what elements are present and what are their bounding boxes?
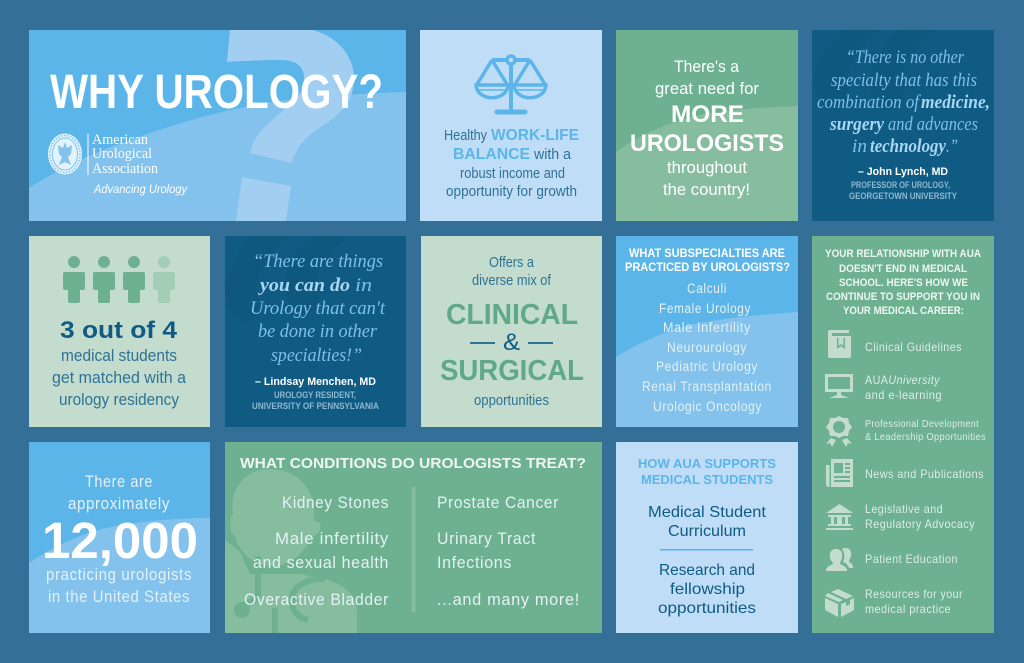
wave overlay [616,312,798,427]
divider [660,549,753,550]
quote emphasis surgery: surgery [829,114,885,135]
text: opportunities [474,393,549,409]
attribution university: GEORGETOWN UNIVERSITY [849,191,957,201]
item: resources: Resources for your [865,587,963,601]
icon: book [828,330,851,358]
panel background [225,442,602,633]
wave overlay [616,106,798,221]
icon: box [825,589,854,617]
icon: newspaper [826,459,853,487]
condition: Infections [437,553,512,572]
text: practicing urologists [46,565,192,584]
decorative quote marks [225,232,352,322]
panel background [616,236,798,427]
emphasis: clinical: CLINICAL [446,299,578,331]
item: news: News and Publications [865,467,984,481]
item: patient education: Patient Education [865,552,958,566]
stat: 3 out of 4 [60,317,178,344]
heading: WHY UROLOGY? [50,66,383,119]
panel background [812,236,994,633]
text: balance: BALANCE [453,146,530,163]
heading line 5: YOUR MEDICAL CAREER: [843,305,964,317]
text: healthy: Healthy [444,128,488,144]
title panel background [29,30,406,221]
panel: relationship with AUA [812,236,994,633]
quote emphasis medicine: medicine, [921,92,990,113]
text: Curriculum [668,523,746,540]
list item: Female Urology [659,301,751,316]
heading line 2: PRACTICED BY UROLOGISTS? [625,262,790,274]
emphasis: surgical: SURGICAL [440,355,584,387]
panel: more urologists [616,30,798,221]
panel: quote John Lynch [812,28,994,221]
ampersand: & [503,329,520,356]
stethoscope join [244,596,258,607]
icon: people [826,548,853,571]
panel background [421,236,602,427]
condition: Male infertility [275,529,389,548]
quote line 2: specialty that has this [831,70,977,91]
item: regulatory: Regulatory Advocacy [865,517,975,531]
attribution title: UROLOGY RESIDENT, [274,390,356,400]
text: diverse mix of [472,273,552,289]
list item: Pediatric Urology [656,359,758,374]
logo divider [88,134,89,175]
attribution university: UNIVERSITY OF PENNSYLVANIA [252,401,379,411]
text: Medical Student [648,504,767,521]
column divider [412,487,416,612]
text: with a: with a [533,147,572,163]
item: e-learning: and e-learning [865,388,942,402]
decorative quote marks [814,28,935,110]
text: the country! [663,180,750,199]
logo wordmark line 3: Association [92,161,159,177]
text: get matched with a [52,368,187,387]
text: opportunities [658,600,756,617]
stethoscope chest piece [234,602,250,618]
heading line 4: CONTINUE TO SUPPORT YOU IN [826,291,980,303]
attribution: – John Lynch, MD [858,166,948,178]
quote line 1: “There are things [253,251,383,272]
panel: subspecialties [616,236,798,427]
quote line 5: in [852,136,867,157]
quote emphasis technology: technology [870,136,946,157]
panel background [29,236,210,427]
list item: Male Infertility [663,320,751,335]
quote line 4: be done in other [258,321,378,342]
text: Research and [659,562,755,579]
text: approximately [68,494,170,513]
quote line 3: combination of [817,92,921,113]
panel: work-life balance [420,30,602,221]
text: opportunity: opportunity for growth [446,184,577,200]
text: fellowship [670,581,745,598]
heading line 1: YOUR RELATIONSHIP WITH AUA [825,248,981,260]
attribution title: PROFESSOR OF UROLOGY, [851,180,950,190]
panel: 3 out of 4 [29,236,210,427]
logo wordmark line 2: Urological [92,146,152,162]
condition: Prostate Cancer [437,493,559,512]
text: robust income: robust income and [460,166,565,182]
emphasis: more: MORE [671,101,744,128]
heading line 2: DOESN'T END IN MEDICAL [839,263,967,275]
quote emphasis: you can do [258,275,350,296]
text: Offers a [489,255,535,271]
panel: how AUA supports [616,442,798,633]
item: leadership: & Leadership Opportunities [865,431,986,443]
condition: Kidney Stones [282,493,389,512]
seal [48,134,82,174]
list item: Neurourology [667,340,747,355]
text: in the United States [48,587,190,606]
tagline: Advancing Urology [93,184,188,196]
item: clinical guidelines: Clinical Guidelines [865,340,962,354]
item: AUAUniversity: AUAUniversity [865,373,940,387]
text: urology residency [59,390,179,409]
quote line 3: Urology that can't [250,298,386,319]
stat: 12,000 [42,512,198,569]
heading: WHAT CONDITIONS DO UROLOGISTS TREAT? [240,455,586,472]
attribution: – Lindsay Menchen, MD [255,376,376,388]
wave overlay [29,518,210,633]
item: professional development: Professional Development [865,418,979,430]
logo wordmark: American [92,132,149,148]
panel: title [29,30,406,221]
panel: quote Lindsay Menchen [225,232,406,427]
condition: and sexual health [253,553,389,572]
wave overlay [29,92,406,221]
closing quote: .” [946,136,958,157]
text: medical students [61,346,177,365]
large question mark [227,30,354,221]
list item: Calculi [687,281,727,296]
item: medical practice: medical practice [865,602,951,616]
text: There are [85,472,153,491]
heading line 1: WHAT SUBSPECIALTIES ARE [629,248,785,260]
rule right [528,342,553,344]
heading line 3: SCHOOL. HERE'S HOW WE [839,277,968,289]
item: legislative: Legislative and [865,502,943,516]
text: great need for [655,79,759,98]
quote line 4: and advances [888,114,978,135]
panel background [29,442,210,633]
panel: conditions [225,442,602,633]
emphasis: urologists: UROLOGISTS [630,130,784,157]
doctor silhouette [225,469,357,633]
text: throughout [667,158,747,177]
text: There's a [674,57,739,76]
icon: building [826,504,853,530]
text: work-life: WORK-LIFE [491,127,579,144]
icon: balance scale [476,56,546,112]
condition: ...and many more! [437,590,580,609]
heading line 1: HOW AUA SUPPORTS [638,457,776,471]
list item: Urologic Oncology [653,399,762,414]
panel background [616,442,798,633]
quote line 5: specialties!” [271,345,362,366]
panel background [225,236,406,427]
icon: award ribbon [826,416,852,447]
rule left [470,342,495,344]
condition: Overactive Bladder [244,590,389,609]
panel background [616,30,798,221]
panel background [420,30,602,221]
icon: person figures [63,256,175,303]
icon: monitor [825,374,853,398]
condition: Urinary Tract [437,529,536,548]
logo: American Urological Association [48,132,149,175]
heading line 2: MEDICAL STUDENTS [641,473,773,487]
list item: Renal Transplantation [642,379,772,394]
quote line 2: in [355,275,372,296]
panel: 12,000 urologists [29,442,210,633]
panel: clinical and surgical [421,236,602,427]
panel background [812,30,994,221]
quote line 1: “There is no other [846,47,965,68]
